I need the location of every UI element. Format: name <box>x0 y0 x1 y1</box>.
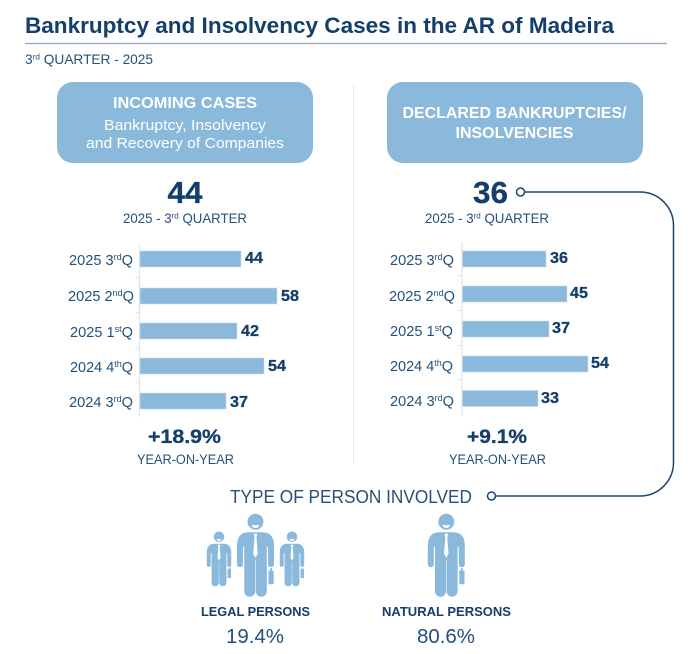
bar chart: declared bankruptcies: 2024 3 <box>390 394 434 410</box>
bar chart: incoming cases: st <box>115 324 122 334</box>
bar chart: incoming cases: 37 <box>230 394 248 411</box>
bar chart: declared bankruptcies: 2025 1 <box>390 324 434 340</box>
year-on-year change: incoming: +18.9% <box>148 427 221 448</box>
group: natural persons <box>382 514 511 648</box>
period label: rd <box>474 210 481 220</box>
bar chart: declared bankruptcies: 33 <box>541 390 559 407</box>
bar chart: incoming cases <box>68 244 299 417</box>
period label: 2025 - 3 <box>123 210 174 226</box>
header box: declared bankruptcies: INSOLVENCIES <box>456 125 574 142</box>
bar chart: incoming cases: th <box>114 359 122 369</box>
heading: type of person involved: TYPE OF PERSON INVOLVED <box>230 487 472 507</box>
value: 19.4%: 19.4% <box>226 626 284 648</box>
bar chart: declared bankruptcies: th <box>434 358 442 368</box>
bar chart: declared bankruptcies: Q <box>444 289 455 305</box>
bar chart: incoming cases: 42 <box>241 323 259 340</box>
bar chart: incoming cases: Q <box>122 253 133 269</box>
bar chart: declared bankruptcies: Q <box>443 253 454 269</box>
bar chart: declared bankruptcies: 2024 4 <box>390 359 434 375</box>
year-on-year change: declared: YEAR-ON-YEAR <box>449 452 546 467</box>
header box: incoming cases: and Recovery of Companies <box>86 135 284 152</box>
bar chart: declared bankruptcies: 2025 3 <box>390 253 434 269</box>
icon: business person <box>428 514 465 597</box>
period label: rd <box>172 210 179 220</box>
period label: 2025 - 3 <box>425 210 476 226</box>
bar chart: incoming cases: Q <box>122 360 133 376</box>
connector arrow from 36 to type of person <box>488 188 674 500</box>
headline figure: 44: 44 <box>168 175 203 210</box>
panel: declared bankruptcies <box>387 82 643 467</box>
bar chart: declared bankruptcies: 36 <box>550 250 568 267</box>
bar chart: declared bankruptcies: Q <box>442 324 453 340</box>
bar chart: declared bankruptcies: 37 <box>552 320 570 337</box>
period label: QUARTER <box>481 210 549 226</box>
subtitle: 3 <box>25 51 33 67</box>
bar chart: incoming cases: 2024 4 <box>70 360 114 376</box>
label: natural persons: NATURAL PERSONS <box>382 604 511 619</box>
headline figure: 36: 36 <box>473 175 508 210</box>
bar chart: declared bankruptcies: Q <box>443 394 454 410</box>
title: Bankruptcy and Insolvency Cases in the AR of Madeira <box>25 13 615 38</box>
subtitle: QUARTER - 2025 <box>40 51 153 67</box>
bar chart: incoming cases: 54 <box>268 358 286 375</box>
period label: QUARTER <box>179 210 247 226</box>
year-on-year change: declared <box>449 427 546 467</box>
year-on-year change: declared: +9.1% <box>467 427 527 448</box>
bar chart: declared bankruptcies <box>389 242 609 416</box>
bar chart: declared bankruptcies: 54 <box>591 355 609 372</box>
icon: three business people <box>207 514 304 597</box>
bar chart: incoming cases: 44 <box>245 250 263 267</box>
group: legal persons <box>201 514 310 648</box>
bar chart: incoming cases: rd <box>114 394 122 404</box>
bar chart: declared bankruptcies: st <box>435 323 442 333</box>
bar chart: declared bankruptcies: 2025 2 <box>389 289 433 305</box>
label: legal persons: LEGAL PERSONS <box>201 604 310 619</box>
bar chart: incoming cases: 2025 2 <box>68 289 112 305</box>
header box: declared bankruptcies: DECLARED BANKRUPTCIES/ <box>402 105 627 122</box>
year-on-year change: incoming: YEAR-ON-YEAR <box>137 452 234 467</box>
header box: incoming cases <box>57 82 313 163</box>
header box: declared bankruptcies <box>387 82 643 163</box>
bar chart: declared bankruptcies: rd <box>435 393 443 403</box>
bar chart: incoming cases: Q <box>122 325 133 341</box>
bar chart: incoming cases: nd <box>113 288 123 298</box>
subtitle: rd <box>33 52 40 62</box>
bar chart: incoming cases: rd <box>114 252 122 262</box>
bar chart: incoming cases: 2025 3 <box>69 253 113 269</box>
value: 80.6%: 80.6% <box>417 626 475 648</box>
bar chart: declared bankruptcies: rd <box>435 252 443 262</box>
bar chart: incoming cases: 58 <box>281 288 299 305</box>
bar chart: declared bankruptcies: Q <box>442 359 453 375</box>
panel: incoming cases <box>57 82 313 467</box>
bar chart: incoming cases: Q <box>122 395 133 411</box>
header box: incoming cases: Bankruptcy, Insolvency <box>104 117 267 134</box>
header box: incoming cases: INCOMING CASES <box>113 95 257 112</box>
bar chart: declared bankruptcies: 45 <box>570 285 588 302</box>
year-on-year change: incoming <box>137 427 234 467</box>
bar chart: declared bankruptcies: nd <box>434 288 444 298</box>
bar chart: incoming cases: Q <box>123 289 134 305</box>
bar chart: incoming cases: 2024 3 <box>69 395 113 411</box>
bar chart: incoming cases: 2025 1 <box>70 325 114 341</box>
